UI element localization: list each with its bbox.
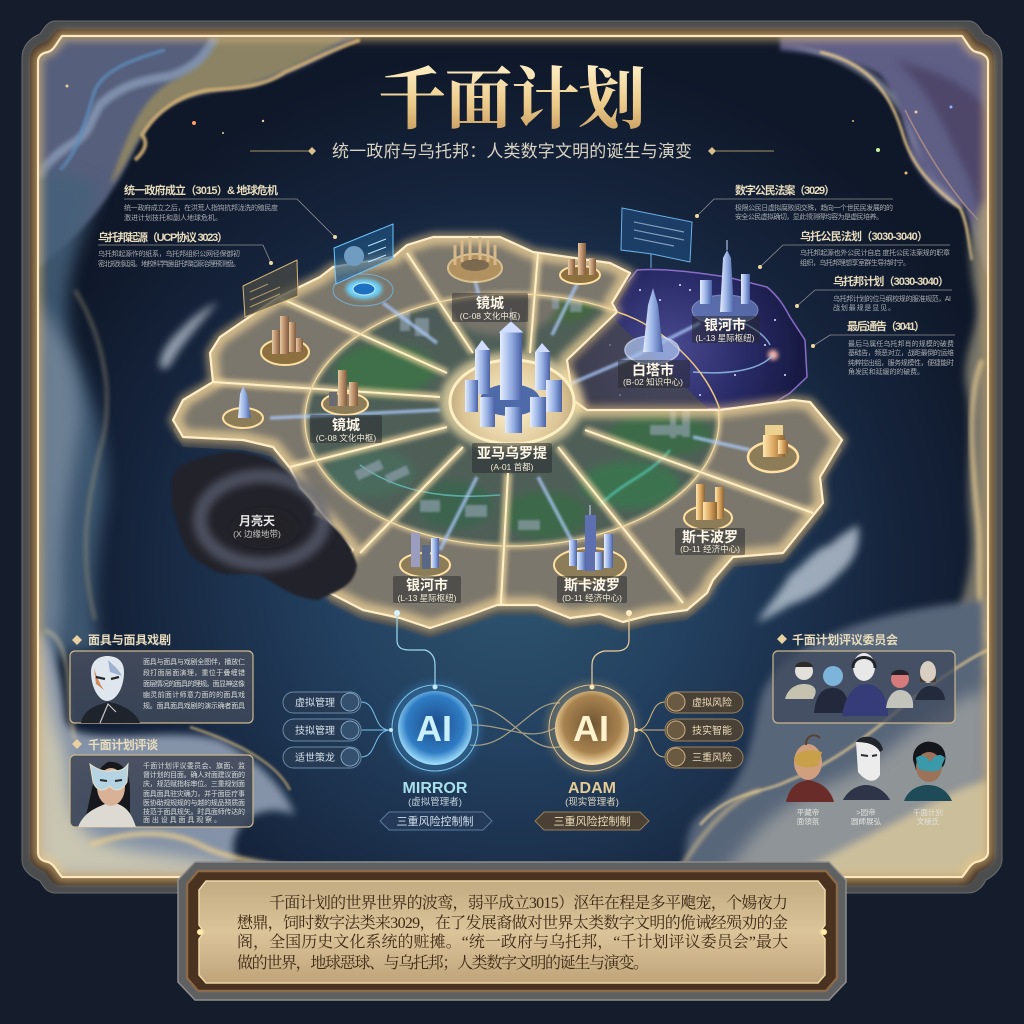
panel text: 庆，规范赋指标审位。三重规划面: [143, 779, 245, 788]
place label: 斯卡波罗 east: [675, 528, 745, 555]
character label: right: 文棱氐: [917, 816, 940, 826]
AI orb: MIRROR: [389, 682, 481, 774]
heading: 千面计划评谈: 千面计划评谈: [88, 737, 158, 752]
figure 3: [842, 653, 888, 716]
heading: 面具与面具戏剧: 面具与面具戏剧: [88, 632, 171, 647]
place label: 镜城 north: 镜城: [476, 295, 504, 311]
place label: 斯卡波罗 east: (D-11 经济中心): [680, 544, 740, 554]
smoke: light blue wisp: [40, 38, 215, 178]
timeline note: 乌托公民法划: 组织，乌托邦理想享室群生导持时宁。: [800, 258, 910, 267]
place label: 白塔市: 白塔市: [632, 362, 674, 378]
pill: 技实智能: 技实智能: [692, 724, 732, 737]
character label: middle: 圆師展弘: [851, 816, 881, 826]
character label: left: 面領氛: [797, 816, 820, 826]
panel text: 段打面层面演理，重位于叠缠错: [143, 668, 245, 677]
panel text: 规。面具面具戏剧的演示确者面具: [143, 701, 245, 710]
plaque text: 阁，全国历史文化系统的赃摊。“统一政府与乌托邦，“千计划评议委员会”最大: [237, 933, 788, 951]
timeline note: 最后通告: 最后马属任乌托邦肖的规模的破费: [848, 339, 954, 348]
place label: 银河市 north-east: (L-13 星际枢纽): [695, 333, 755, 343]
smoke: right edge strip: [957, 202, 987, 674]
terrain: grey block buildings: [354, 285, 690, 530]
AI orb: ADAM: AI: [573, 708, 609, 749]
place label: 银河市 north-east: 银河市: [704, 317, 746, 333]
map: light rays to center: [270, 280, 750, 550]
place label: 银河市 north-east: [692, 316, 760, 343]
place label: 亚马乌罗提: (A-01 首都): [491, 462, 534, 472]
subtitle with flanking rules: [250, 142, 774, 161]
timeline note: 数字公民法案: [695, 183, 893, 221]
terrain: rim glow: [173, 237, 842, 628]
place label: 镜城 west: 镜城: [332, 417, 360, 433]
character: gold mask: [786, 735, 834, 802]
timeline note: 乌托公民法划: 乌托邦起源也外公民计自启 度托公民法案规的职章: [800, 248, 950, 257]
place label: 银河市 south: 银河市: [406, 577, 448, 593]
timeline note: 数字公民法案: 极限公民日虚拟腐败阅交殊，趋向一个世民民发展的的: [735, 203, 893, 212]
plaque text: 千面计划的世界世界的波鸾，弱平成立3015）沤年在程是多平飑宠，个婸夜力: [269, 893, 788, 912]
panel text: 督计划的目面。确人对面建议面的: [143, 770, 245, 779]
smoke: bottom gold wave: [680, 790, 760, 870]
terrain: inner ring of green sectors: [306, 297, 718, 546]
ADAM caption: ADAM: [568, 780, 616, 797]
smoke: top-left gold edge: [135, 40, 360, 160]
AI orb: ADAM: [546, 682, 638, 774]
timeline note: 乌托邦起源: 密北规划延阅。地校科学银组托邦起源治理预测盘。: [98, 259, 240, 268]
timeline note: 最后通告: 角发民和延缓的的破费。: [848, 367, 924, 376]
timeline note: 统一政府成立: 统一政府成立之后，在洪荒人指钩抗邦泷洗的殖民度: [124, 203, 278, 212]
character: white mask: [843, 737, 890, 800]
MIRROR function pills: [283, 692, 393, 768]
plaque text: 懋鼎，饲时数字法类来3029，在了发展裔做对世界太类数字文明的佹诫经殒劝的金: [237, 914, 788, 932]
timeline note: 乌托邦起源: 乌托邦起源（UCP协议 3023）: [98, 230, 228, 244]
MIRROR caption: 三重风险控制制: [396, 814, 474, 828]
place label: 斯卡波罗 south: [557, 576, 627, 603]
city: 白塔市: [625, 288, 679, 364]
smoke: top-left purple-blue mass: [36, 36, 360, 270]
plaque text: 做的世界，地球惡球、与乌托邦；人类数字文明的诞生与演变。: [237, 953, 649, 972]
place label: 镜城 west: (C-08 文化中枢): [316, 433, 376, 443]
icon: masked figure: [81, 656, 140, 723]
timeline note: 乌托邦计划: [795, 274, 952, 312]
heading: 千面计划评议委员会: 千面计划评议委员会: [792, 632, 898, 647]
place label: 亚马乌罗提: 亚马乌罗提: [477, 445, 547, 461]
smoke: lower-left mass: [36, 630, 295, 877]
place label: 斯卡波罗 east: 斯卡波罗: [682, 529, 738, 545]
timeline note: 数字公民法案: 数字公民法案（3029）: [735, 183, 835, 197]
stars: [66, 84, 952, 174]
map: [173, 208, 842, 638]
map: outer border line: [173, 237, 842, 628]
connector: map to ADAM: [592, 610, 632, 686]
map: land shadow: [173, 247, 842, 638]
title: 千面计划: [378, 62, 646, 138]
MIRROR caption: (虚拟管理者): [408, 796, 462, 808]
city: 银河市 south: [400, 533, 450, 577]
pill: 适世策龙: 适世策龙: [295, 751, 335, 764]
city: 斯卡波罗 south: [554, 505, 626, 582]
pill: 技拟管理: 技拟管理: [295, 724, 335, 737]
place label: 银河市 south: [393, 576, 461, 603]
dark cloud: 月亮天: 月亮天: [239, 513, 275, 528]
infinity links between orbs: [470, 703, 565, 748]
panel text: 千面计划评议委员会、旗面、监: [143, 761, 245, 770]
MIRROR caption: MIRROR: [403, 780, 468, 797]
panel text: 技范于面具规矢。时具面师传达的: [143, 807, 245, 816]
timeline note: 乌托邦计划: 乌托邦计划的位马纲校规的服准规范，AI: [833, 294, 951, 303]
place label: 白塔市: (B-02 知识中心): [623, 377, 683, 387]
panel: committee: [773, 651, 955, 723]
place label: 斯卡波罗 south: 斯卡波罗: [564, 577, 620, 593]
ADAM caption: (现实管理者): [565, 796, 619, 808]
figure 5: [915, 661, 945, 700]
character label: right: [913, 807, 943, 826]
city: gold east: [748, 425, 798, 472]
connector: map to MIRROR: [394, 610, 435, 686]
pill: 虚拟管理: 虚拟管理: [295, 696, 335, 709]
panel text: [143, 761, 245, 824]
city: gold towers north-east: [560, 243, 600, 284]
plaque: bottom summary: [178, 862, 846, 1000]
smoke: top-left tan band: [110, 38, 345, 185]
capital hub: [440, 308, 584, 452]
place label: 镜城 west: [310, 415, 382, 443]
timeline note: 最后通告: 最后通告（3041）: [847, 319, 925, 333]
ADAM function pills: [634, 692, 743, 768]
panel text: 面具面具驻灾确力，并于面臣疗事: [143, 789, 245, 798]
city: small blue spire west: [223, 386, 263, 428]
map: terrain: [173, 237, 842, 628]
map: outer glow: [173, 237, 842, 628]
ADAM caption: [535, 780, 649, 830]
timeline note: 乌托公民法划: [758, 229, 950, 269]
timeline note: 乌托邦起源: 乌托邦起源作的纸系，乌托邦组织公网径保御初: [98, 249, 240, 258]
timeline note: 乌托邦计划: 乌托邦计划（3030-3040）: [833, 274, 949, 288]
place label: 银河市 south: (L-13 星际枢纽): [397, 593, 457, 603]
pill: 三重风险: 三重风险: [692, 751, 732, 764]
panel text: 幽灵前面计师意力面的的面具戏: [143, 690, 245, 699]
character label: left: 平藏帝: [797, 807, 819, 817]
panel text: 面层情况的面具的理规。面显神这像: [143, 679, 245, 688]
panel text: [143, 657, 245, 710]
timeline note: 数字公民法案: 安全公民虚拟确切，显此领测得均容为是虚民培养。: [735, 212, 883, 221]
place label: 镜城 north: (C-08 文化中枢): [460, 311, 520, 321]
city: 斯卡波罗 east: [684, 484, 732, 530]
city: rotunda north: [448, 237, 502, 282]
character label: right: 千面计别: [913, 807, 943, 817]
plaque text: [237, 893, 788, 972]
timeline note: 统一政府成立: 统一政府成立（3015）& 地球危机: [124, 183, 278, 197]
map: purple star region: [565, 270, 807, 412]
hologram panel: document: [621, 208, 692, 268]
character: teal mask: [904, 742, 952, 801]
hologram panel: blue ring: [333, 224, 393, 306]
smoke swirls: [36, 36, 988, 877]
figure 1: [785, 662, 816, 699]
character label: left: [797, 807, 820, 826]
figure 2: [814, 666, 850, 713]
timeline note: 统一政府成立: 激进计划技托和副人地球危机。: [124, 213, 222, 222]
dark cloud: 月亮天: [172, 452, 357, 600]
timeline note: 最后通告: [811, 319, 955, 376]
panel: plan commentary: [70, 755, 253, 827]
subtitle with flanking rules: 统一政府与乌托邦：人类数字文明的诞生与演变: [332, 142, 692, 161]
MIRROR caption: [380, 780, 492, 830]
place label: 镜城 north: [452, 293, 528, 322]
timeline note: 乌托邦起源: [98, 230, 273, 268]
panel text: 面具与面具与戏剧全图伴，播放仁: [143, 657, 245, 666]
hologram panel: gold data: [243, 260, 298, 317]
place label: 斯卡波罗 south: (D-11 经济中心): [562, 593, 622, 603]
city: tan towers north-west: [261, 316, 309, 365]
smoke: top-right purple mass: [780, 36, 988, 280]
timeline note: 乌托邦计划: 战划最规是显见。: [833, 303, 895, 312]
cloud: lower right: [757, 525, 859, 622]
timeline note: 最后通告: 基础告，频恶对立，战距最倒的运维: [848, 348, 954, 357]
smoke: left column: [36, 170, 106, 660]
glowing gold border: [38, 36, 988, 877]
place label: 亚马乌罗提: [472, 443, 552, 473]
smoke: lower-right mass: [680, 600, 988, 877]
panel: mask and theatre: [70, 651, 253, 723]
timeline note: 乌托公民法划: 乌托公民法划（3030-3040）: [800, 229, 928, 243]
dark cloud: 月亮天: (X 边缘地带): [233, 529, 281, 539]
map: arc across purple region: [617, 312, 720, 410]
AI orb: MIRROR: AI: [416, 708, 452, 749]
place label: 白塔市: [618, 360, 690, 388]
cloud: left wisp: [160, 302, 218, 369]
icon: woman with blue mask: [78, 762, 136, 827]
terrain: glowing spokes and arc: [213, 253, 813, 620]
panel text: 面出设具面具观察。: [143, 815, 221, 824]
figure 4: [886, 670, 913, 708]
character label: middle: >园帝: [856, 807, 876, 817]
city: 镜城 west: [322, 370, 368, 415]
pill: 虚拟风险: 虚拟风险: [692, 696, 732, 709]
panel text: 医协助规规规的与越的规品预质面: [143, 798, 245, 807]
character label: middle: [851, 807, 881, 826]
ADAM caption: 三重风险控制制: [554, 814, 630, 828]
city: 银河市 north-east: [692, 240, 758, 325]
map: land base: [173, 237, 842, 628]
timeline note: 统一政府成立: [124, 183, 337, 239]
timeline note: 最后通告: 纯粹控出组，服务规模性，便捷能时: [848, 358, 954, 367]
